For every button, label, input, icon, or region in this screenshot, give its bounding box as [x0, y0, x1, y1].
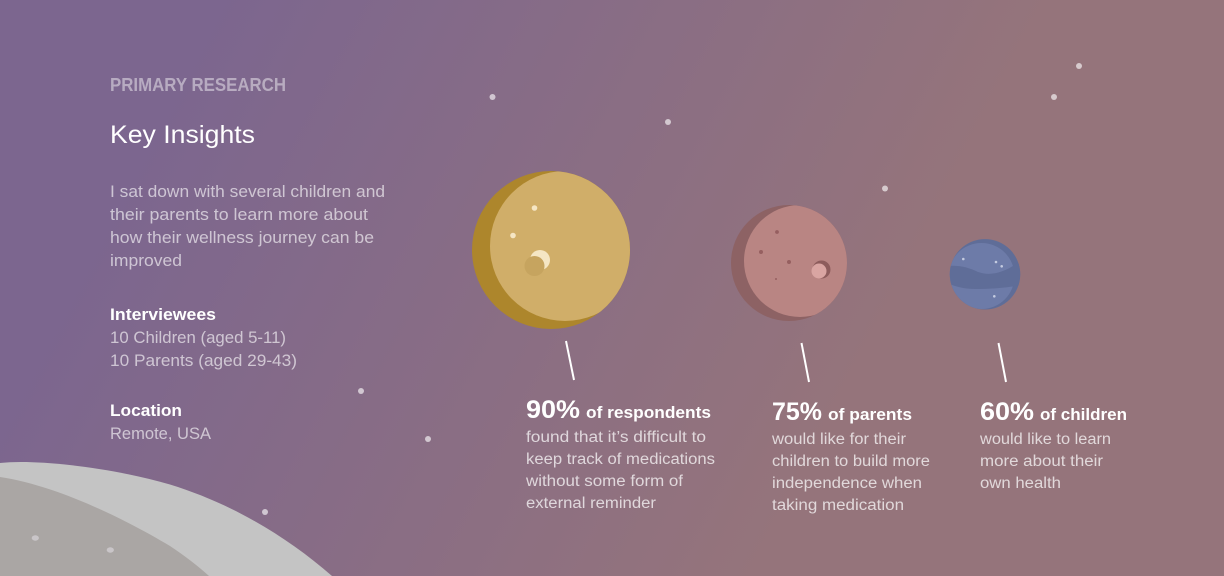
stat: 75% of parents: independence when: [772, 475, 922, 492]
section label: PRIMARY RESEARCH: [110, 75, 286, 95]
planet: pink: [731, 205, 856, 321]
stat: 75% of parents: children to build more: [772, 453, 930, 470]
interviewees: [110, 305, 297, 370]
intro text: improved: [110, 251, 182, 270]
stat: 60% of children: of children: [1040, 405, 1127, 424]
stat: 75% of parents: of parents: [828, 405, 912, 424]
stat: 60% of children: 60%: [980, 398, 1034, 426]
stat: 75% of parents: would like for their: [771, 431, 906, 448]
intro text: their parents to learn more about: [110, 205, 368, 224]
stat: 90% of respondents: 90%: [526, 396, 580, 424]
stat: 60% of children: more about their: [980, 453, 1103, 470]
planet: blue: [948, 239, 1022, 310]
location: [110, 401, 212, 443]
intro text: [110, 182, 385, 270]
stat: 90% of respondents: without some form of: [525, 473, 684, 490]
intro text: how their wellness journey can be: [110, 228, 374, 247]
planet: yellow: [472, 171, 640, 329]
stat: 90% of respondents: [525, 396, 715, 512]
title: Key Insights: [110, 121, 255, 149]
interviewees: 10 Children (aged 5-11): [110, 328, 286, 347]
interviewees: Interviewees: [110, 305, 216, 324]
interviewees: 10 Parents (aged 29-43): [110, 351, 297, 370]
stat: 75% of parents: 75%: [772, 398, 822, 426]
stat: 90% of respondents: of respondents: [586, 403, 711, 422]
stat: 90% of respondents: keep track of medications: [526, 451, 715, 468]
location: Location: [110, 401, 182, 420]
stat: 60% of children: own health: [980, 475, 1061, 492]
stat: 75% of parents: [771, 398, 930, 514]
stat: 60% of children: would like to learn: [979, 431, 1111, 448]
moon surface: [0, 462, 332, 576]
location: Remote, USA: [110, 424, 212, 443]
intro text: I sat down with several children and: [110, 182, 385, 201]
stat: 90% of respondents: external reminder: [526, 495, 656, 512]
stat: 75% of parents: taking medication: [772, 497, 904, 514]
pointer: 90%: [566, 341, 574, 380]
pointer: 75%: [802, 343, 809, 382]
stat: 90% of respondents: found that it’s difficult to: [526, 429, 706, 446]
stars: [262, 63, 1082, 515]
pointer: 60%: [998, 343, 1006, 382]
stat: 60% of children: [979, 398, 1127, 492]
